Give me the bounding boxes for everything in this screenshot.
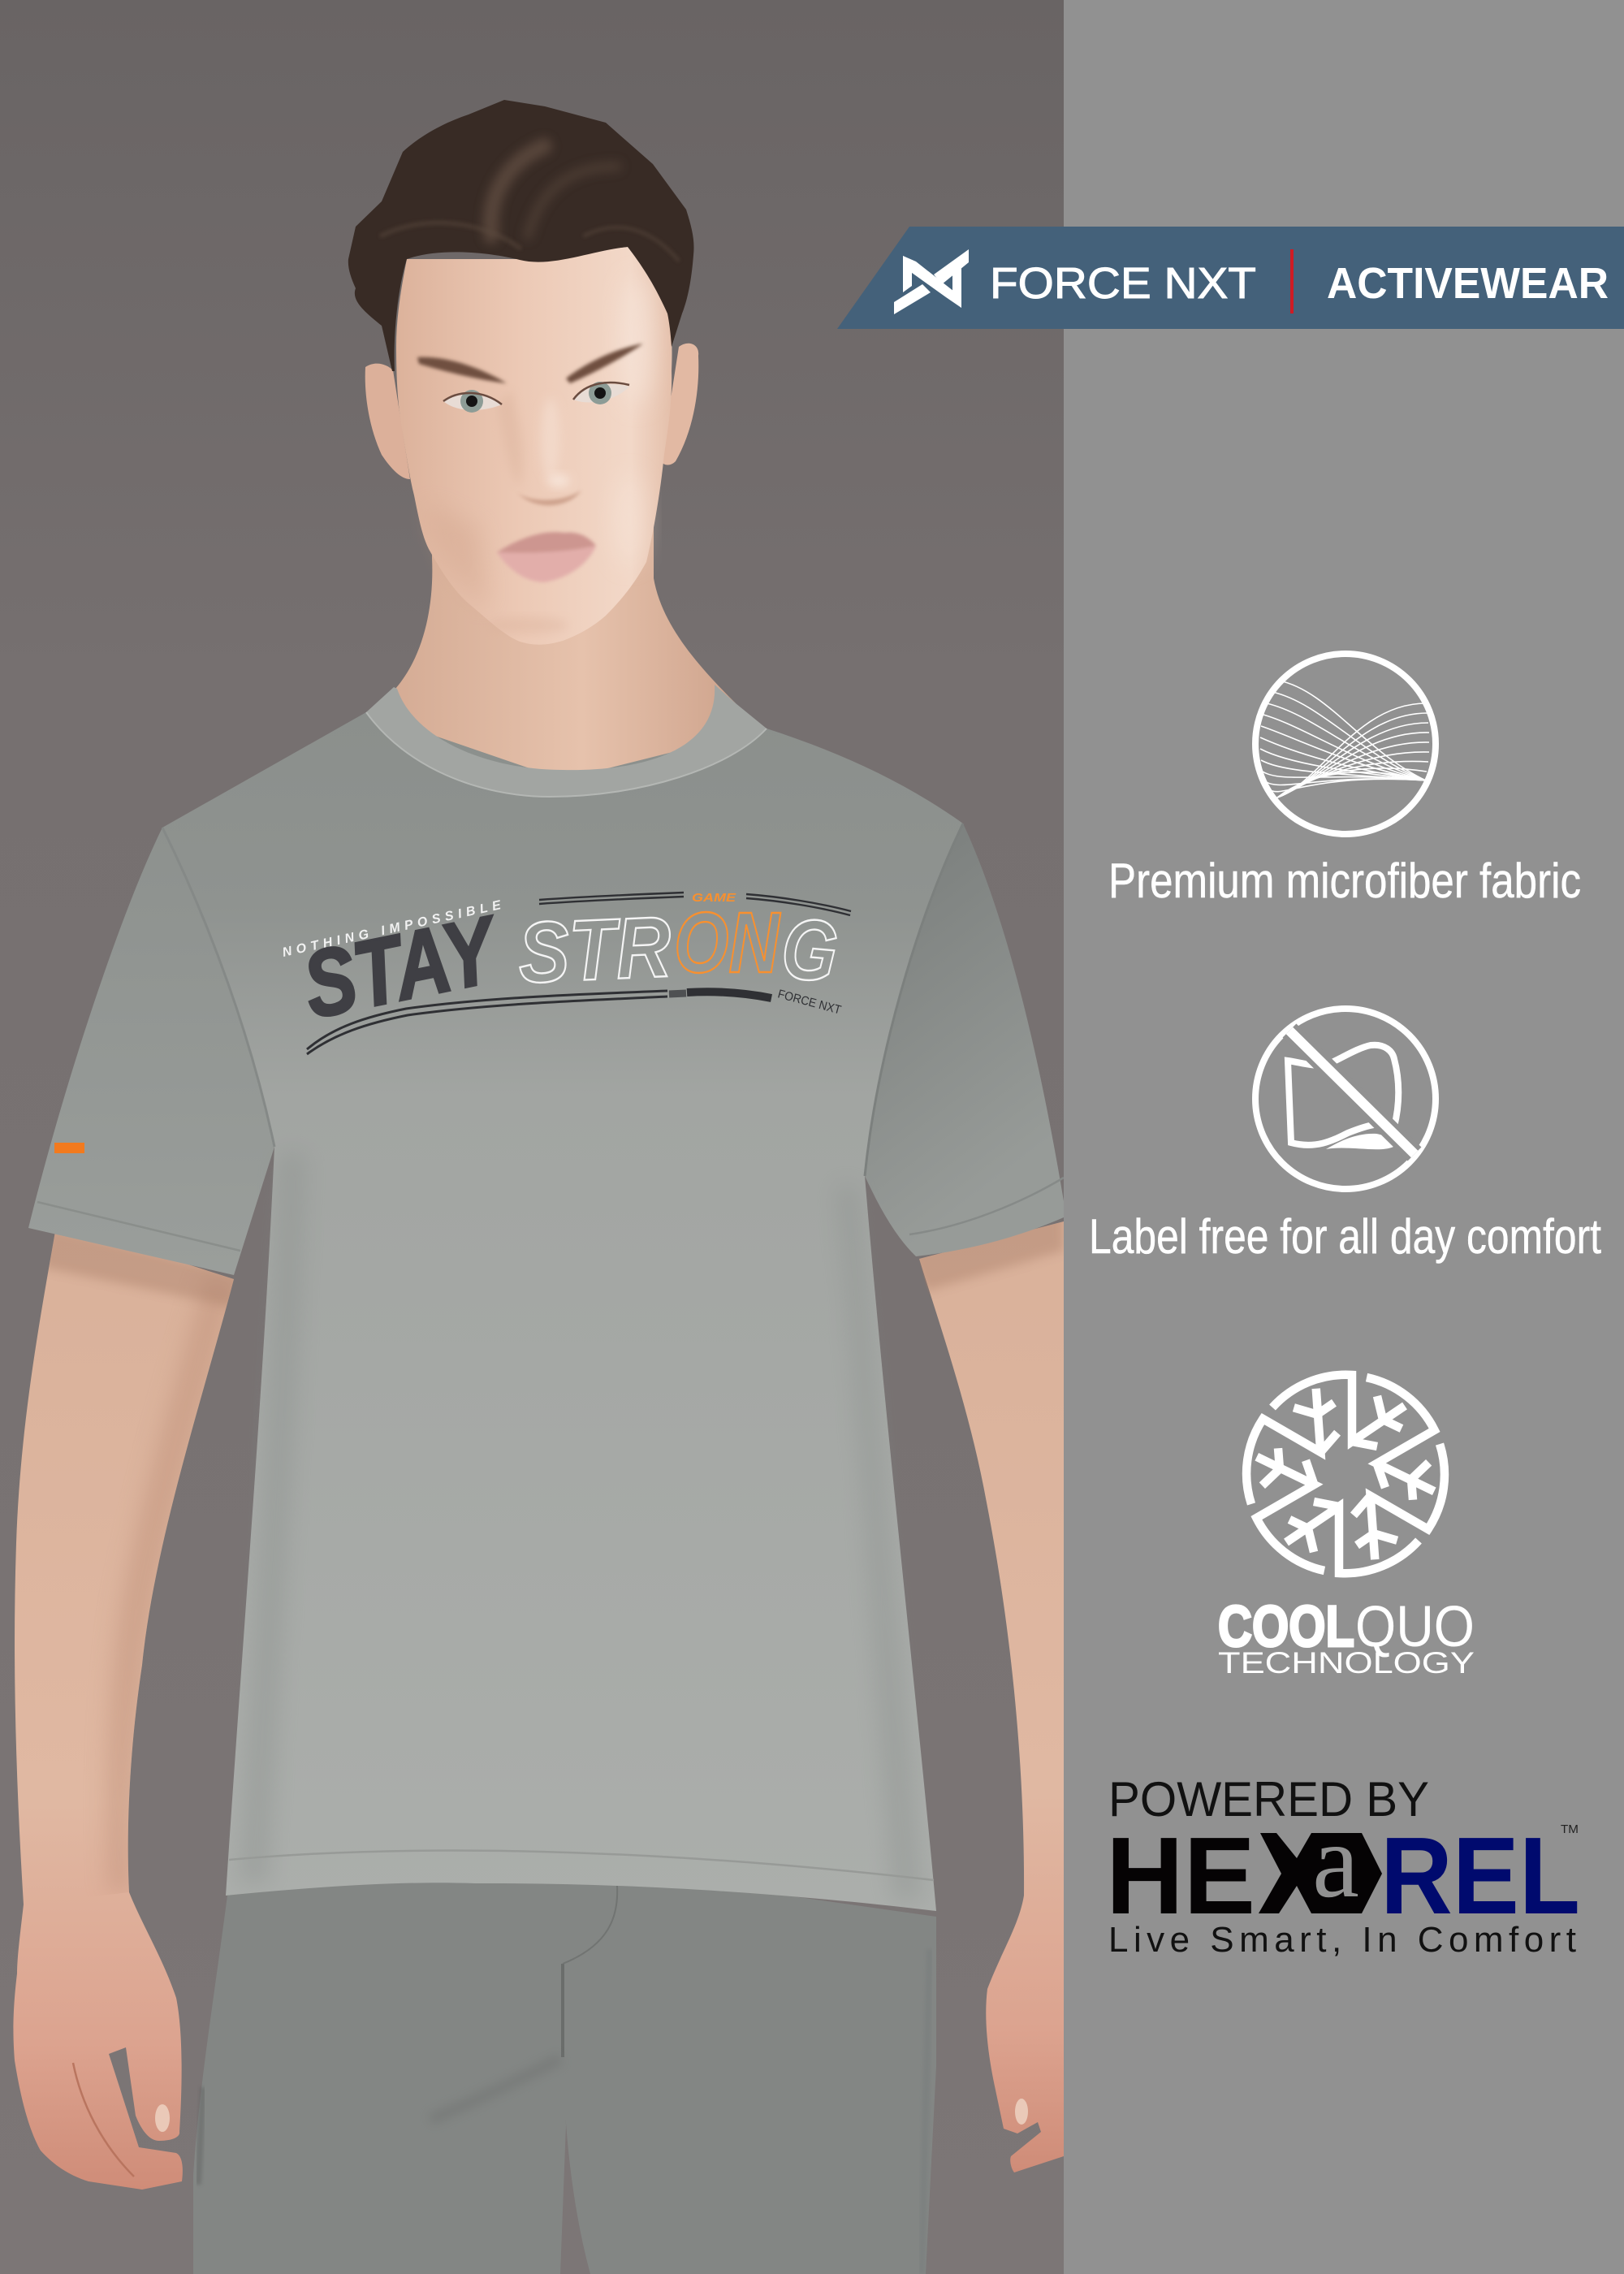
feature: premium microfiber fabric bbox=[1108, 654, 1581, 908]
left arm and hand bbox=[13, 1222, 244, 2190]
tagline: Live Smart, In Comfort bbox=[1108, 1920, 1576, 1960]
panel: photo background bbox=[0, 0, 1064, 2274]
wordmark: COOLQUO bbox=[1218, 1595, 1475, 1659]
print: STRONG outline: ON bbox=[674, 895, 781, 991]
POWERED BY: POWERED BY bbox=[1108, 1772, 1429, 1827]
sleeve seams and hems bbox=[37, 824, 1064, 1880]
print: NOTHING IMPOSSIBLE: NOTHING IMPOSSIBLE bbox=[281, 898, 503, 960]
print: upper double lines bbox=[539, 893, 851, 915]
icon: snowflake wheel bbox=[1223, 1361, 1468, 1587]
hexagon X with a: a bbox=[1312, 1803, 1359, 1920]
print: lower double line and bar bbox=[307, 991, 771, 1054]
hexagon X with a bbox=[1259, 1803, 1382, 1920]
face shading and highlights bbox=[426, 276, 655, 633]
torso bbox=[162, 712, 963, 1911]
HEX letters: HE bbox=[1106, 1814, 1255, 1937]
shorts bbox=[193, 1876, 936, 2274]
trademark: TM bbox=[1561, 1822, 1579, 1836]
banner: FORCE NXT ACTIVEWEAR bbox=[837, 227, 1624, 329]
photo: male model wearing t-shirt and shorts bbox=[13, 100, 1064, 2274]
brand name: FORCE NXT bbox=[990, 259, 1256, 308]
category name: ACTIVEWEAR bbox=[1327, 259, 1609, 308]
feature: label free comfort bbox=[1089, 1009, 1601, 1264]
right ear bbox=[661, 344, 698, 465]
right eye bbox=[573, 382, 629, 404]
right sleeve bbox=[865, 824, 1064, 1256]
icon: woven fibre circle bbox=[1255, 654, 1436, 834]
panel: right feature column bbox=[1064, 0, 1624, 2274]
left sleeve bbox=[28, 828, 274, 1275]
neck bbox=[396, 528, 736, 770]
t-shirt bbox=[28, 685, 1064, 1911]
wordmark: COOLQUO: COOL bbox=[1218, 1595, 1354, 1659]
lips bbox=[497, 532, 596, 582]
REL letters: REL bbox=[1380, 1814, 1580, 1937]
feature: Coolquo technology bbox=[1218, 1361, 1475, 1680]
icon: Force NXT logo mark bbox=[894, 249, 969, 314]
print: STRONG outline bbox=[516, 895, 841, 1001]
face bbox=[396, 247, 672, 645]
eyebrows bbox=[417, 344, 643, 383]
icon: crossed-out label bbox=[1255, 1009, 1436, 1189]
sleeve branding dash bbox=[54, 1143, 84, 1153]
wordmark: TECHNOLOGY: TECHNOLOGY bbox=[1218, 1646, 1475, 1680]
wordmark: COOLQUO: QUO bbox=[1355, 1595, 1475, 1659]
logo: powered by Hexarel bbox=[1106, 1772, 1580, 1960]
hair bbox=[348, 100, 694, 371]
print: FORCE NXT: FORCE NXT bbox=[776, 987, 843, 1018]
print: GAME: GAME bbox=[692, 891, 736, 905]
red divider bbox=[1290, 249, 1294, 313]
t-shirt print: STAY STRONG graphic bbox=[281, 891, 851, 1054]
collar bbox=[366, 685, 767, 797]
torso shading bbox=[245, 1260, 292, 1876]
shorts shading and seams bbox=[561, 1964, 564, 2057]
left eye bbox=[443, 390, 502, 413]
print: STAY: STAY bbox=[295, 896, 510, 1038]
left ear bbox=[365, 364, 410, 479]
print: STRONG outline: STR bbox=[516, 899, 673, 1001]
hair highlight strands bbox=[382, 146, 678, 260]
print: STRONG outline: G bbox=[778, 900, 841, 1001]
right arm and hand bbox=[909, 1210, 1064, 2172]
